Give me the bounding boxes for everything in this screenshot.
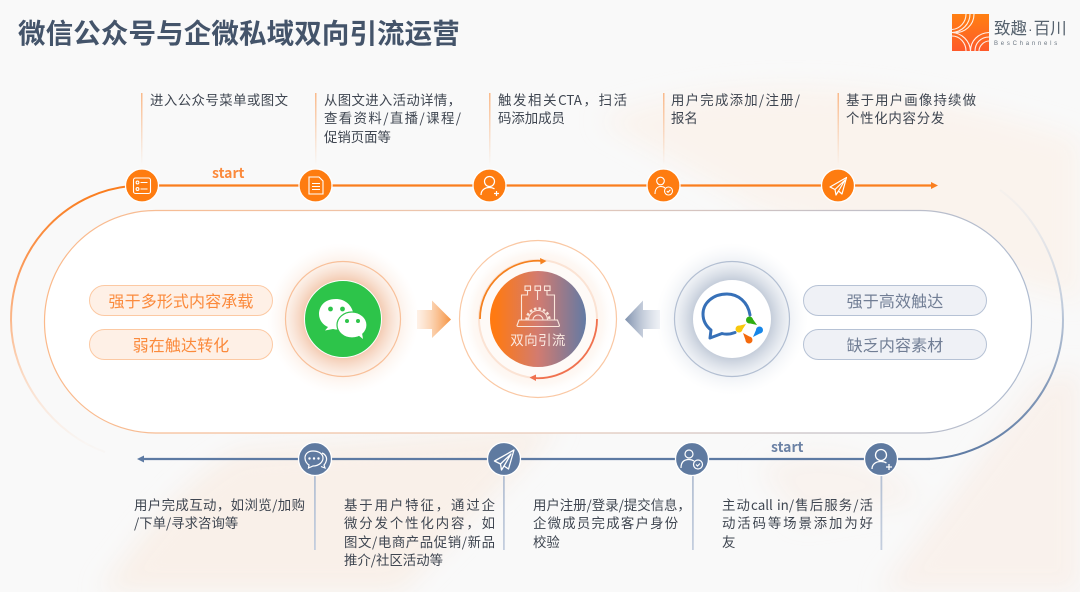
gear laptop icon xyxy=(517,286,560,326)
bottom step 2 text: 推介/社区活动等 xyxy=(344,549,443,569)
title: 微信公众号与企微私域双向引流运营 xyxy=(18,11,460,51)
top step 4 text: 用户完成添加/注册/ xyxy=(671,89,800,109)
top step 3 text xyxy=(498,89,627,127)
pill: strong in reach xyxy=(803,285,987,316)
top step 1 text: 进入公众号菜单或图文 xyxy=(150,89,288,109)
top step 4 text xyxy=(671,89,800,127)
pill: lacks content: 缺乏内容素材 xyxy=(847,332,943,356)
pill: strong in content xyxy=(89,285,273,316)
top step 2 text xyxy=(324,89,461,146)
start label orange: start xyxy=(212,163,244,183)
top step 2 text: 查看资料/直播/课程/ xyxy=(324,107,461,127)
top step 3 text: 码添加成员 xyxy=(498,107,565,127)
bottom step 2 text xyxy=(344,494,495,569)
red arc arrow xyxy=(530,319,597,381)
top step 3 text: 触发相关CTA，扫活 xyxy=(498,89,627,109)
bottom step 4 text: 主动call in/售后服务/活 xyxy=(722,494,873,514)
bottom step 3 text: 企微成员完成客户身份 xyxy=(533,512,679,532)
bottom step 4 text xyxy=(722,494,873,551)
logo xyxy=(952,14,1067,51)
pill: weak in conversion: 弱在触达转化 xyxy=(133,332,229,356)
top step 5 text xyxy=(846,89,976,127)
bottom step 1 text xyxy=(134,494,305,532)
bottom step 1 text: 用户完成互动，如浏览/加购 xyxy=(134,494,305,514)
bottom step 1 text: /下单/寻求咨询等 xyxy=(134,512,238,532)
start label blue: start xyxy=(771,437,803,457)
center hub label: 双向引流 xyxy=(510,329,566,349)
bottom step 4 text: 友 xyxy=(722,531,735,551)
logo: 致趣·百川 xyxy=(994,15,1067,39)
pill: weak in conversion xyxy=(89,329,273,360)
bottom step 2 text: 微分发个性化内容，如 xyxy=(344,512,495,532)
orange arc arrow xyxy=(480,258,546,319)
pill: strong in reach: 强于高效触达 xyxy=(847,288,943,312)
top step 5 text: 基于用户画像持续做 xyxy=(846,89,976,109)
top step 5 text: 个性化内容分发 xyxy=(846,107,945,127)
top step 2 text: 从图文进入活动详情， xyxy=(324,89,461,109)
bottom step 4 text: 动活码等场景添加为好 xyxy=(722,512,873,532)
bottom step 3 text xyxy=(533,494,691,551)
bottom step 3 text: 校验 xyxy=(533,531,560,551)
logo: BesChannels xyxy=(994,41,1060,47)
pill: lacks content xyxy=(803,329,987,360)
bottom step 2 text: 基于用户特征，通过企 xyxy=(344,494,495,514)
bottom step 3 text: 用户注册/登录/提交信息， xyxy=(533,494,691,514)
top step 4 text: 报名 xyxy=(671,107,698,127)
top step 2 text: 促销页面等 xyxy=(324,126,391,146)
bottom step 2 text: 图文/电商产品促销/新品 xyxy=(344,531,495,551)
pill: strong in content: 强于多形式内容承载 xyxy=(108,288,254,312)
